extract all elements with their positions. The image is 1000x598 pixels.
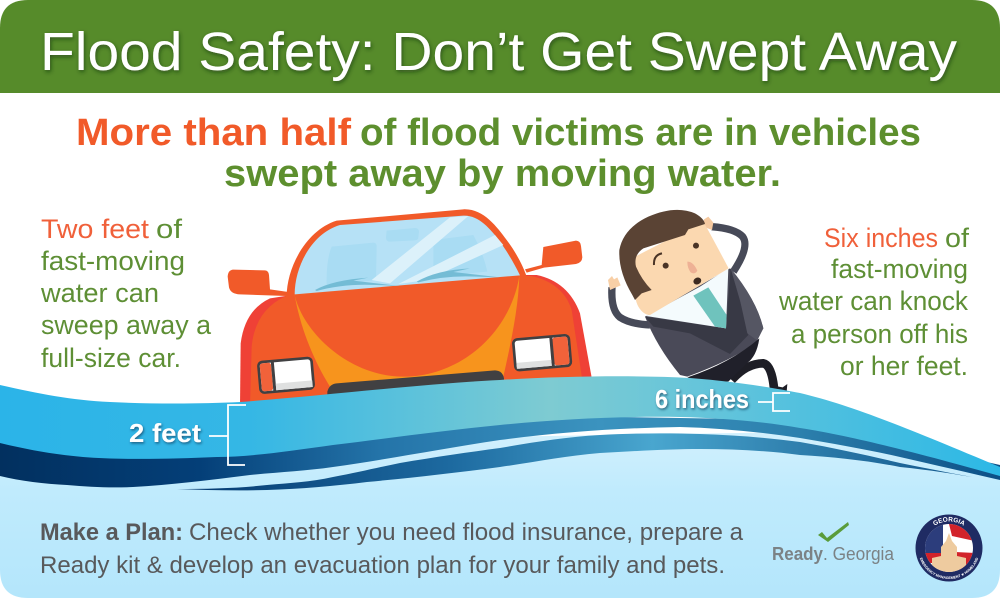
car illustration xyxy=(228,209,593,407)
icon: man's leg xyxy=(732,363,774,388)
trousers xyxy=(687,338,759,382)
right text block: Six inches xyxy=(824,223,938,253)
water: main cyan wave xyxy=(0,376,1000,476)
windshield glare xyxy=(372,216,503,284)
seal: Georgia emergency management: GEORGIA xyxy=(933,516,964,526)
grille xyxy=(327,370,504,394)
left text block: Two feet xyxy=(41,214,150,244)
tie xyxy=(693,287,727,328)
amber hood trim xyxy=(295,277,519,387)
right headlight xyxy=(513,335,571,370)
windshield xyxy=(287,209,527,297)
left text block: of xyxy=(156,214,183,244)
right text block: water can knock xyxy=(778,286,968,316)
label: 2 feet: 2 feet xyxy=(129,418,201,448)
water: second wave sliver xyxy=(177,433,983,490)
logo: Ready Georgia: Ready xyxy=(772,544,823,564)
shirt xyxy=(646,268,728,328)
left text block: water can xyxy=(40,278,159,308)
icon: man's foot xyxy=(773,384,788,390)
icon: right arm xyxy=(712,227,745,272)
headline: of flood victims are in vehicles xyxy=(360,112,921,154)
right text block xyxy=(778,223,970,381)
jacket xyxy=(645,268,763,377)
lower water background xyxy=(0,432,1000,598)
hair xyxy=(619,210,705,300)
left text block: fast-moving xyxy=(41,246,185,276)
make a plan text: Check whether you need flood insurance, prepare a xyxy=(189,519,744,546)
left text block: sweep away a xyxy=(41,310,212,340)
left text block xyxy=(40,214,212,373)
right text block: or her feet. xyxy=(840,351,968,381)
icon: right hand xyxy=(703,217,713,230)
head xyxy=(634,222,729,315)
windshield glass xyxy=(295,216,520,294)
icon: right mirror xyxy=(525,241,582,273)
seal: Georgia emergency management xyxy=(916,514,982,582)
headline second line: swept away by moving water. xyxy=(224,153,781,195)
seal flag xyxy=(925,524,975,575)
logo: Ready Georgia xyxy=(772,522,895,564)
face features xyxy=(654,243,702,286)
seats and mirror xyxy=(327,228,487,286)
car body shadow xyxy=(240,275,593,407)
title: Flood Safety: Don’t Get Swept Away xyxy=(40,22,957,82)
title banner xyxy=(0,0,1000,93)
jacket side panel xyxy=(731,268,763,340)
make a plan text: Make a Plan: xyxy=(40,519,183,546)
icon: green check xyxy=(818,522,849,542)
icon: left arm xyxy=(612,287,650,325)
make a plan text: Ready kit & develop an evacuation plan for your family and pets. xyxy=(40,552,725,579)
icon: left hand xyxy=(608,276,621,290)
bracket: 2 feet xyxy=(209,405,246,465)
man illustration xyxy=(608,210,787,392)
bracket: 6 inches xyxy=(758,393,790,411)
jacket lapel shading xyxy=(645,268,748,354)
icon: left mirror xyxy=(228,270,288,296)
car body xyxy=(250,276,583,407)
label: 6 inches: 6 inches xyxy=(655,384,749,414)
right text block: fast-moving xyxy=(831,254,968,284)
right text block: of xyxy=(945,223,970,253)
headline: More than half xyxy=(76,112,351,154)
water: dark wave band xyxy=(0,415,1000,487)
hood xyxy=(295,276,519,377)
right text block: a person off his xyxy=(791,319,968,349)
seal: Georgia emergency management: EMERGENCY MANAGEMENT ★ HOMELAND xyxy=(920,558,978,579)
wipers xyxy=(315,268,500,291)
make a plan text xyxy=(40,519,744,579)
logo: Ready Georgia: . Georgia xyxy=(823,544,895,564)
left headlight xyxy=(258,358,314,393)
left text block: full-size car. xyxy=(41,343,181,373)
